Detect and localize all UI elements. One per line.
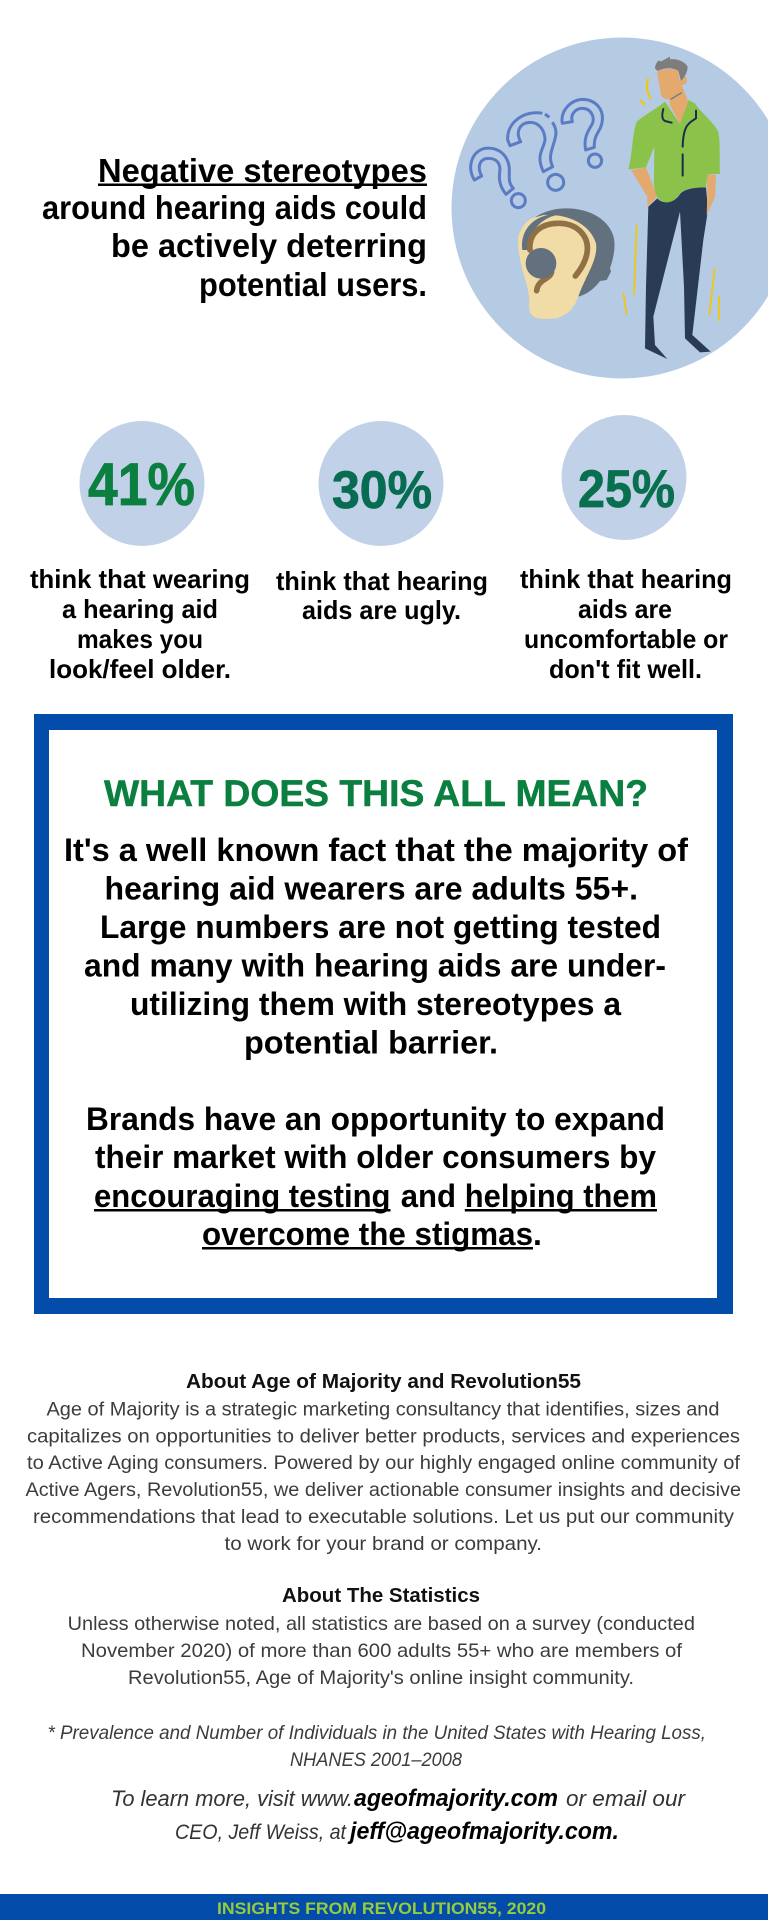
panel text: second paragraph: . <box>533 1216 542 1252</box>
text block: about the statistics: November 2020) of more than 600 adults 55+ who are members of <box>81 1640 683 1662</box>
text block: about the statistics <box>68 1585 695 1689</box>
panel text: first paragraph: utilizing them with stereotypes a <box>130 986 621 1022</box>
text block: about the statistics: Revolution55, Age of Majority's online insight community. <box>128 1667 634 1689</box>
stat text: 41%: think that wearing <box>30 564 250 594</box>
panel text: first paragraph: and many with hearing aids are under- <box>84 948 666 984</box>
footer bar: INSIGHTS FROM REVOLUTION55, 2020 <box>217 1899 546 1918</box>
text block: about age of majority: About Age of Majority and Revolution55 <box>186 1371 581 1393</box>
panel text: first paragraph: It's a well known fact that the majority of <box>64 832 688 868</box>
stat: 30% <box>276 421 488 625</box>
text block: contact details: ageofmajority.com <box>354 1785 558 1812</box>
heading text: Negative stereotypes <box>98 152 427 189</box>
text block: about age of majority <box>26 1371 741 1555</box>
panel text: second paragraph: encouraging testing <box>94 1178 390 1214</box>
panel text: second paragraph: helping them <box>465 1178 657 1214</box>
icon: ear with hearing aid <box>518 208 615 319</box>
text block: about age of majority: Active Agers, Revolution55, we deliver actionable consumer insights and decisive <box>26 1479 741 1501</box>
stat text: 25%: don't fit well. <box>549 654 702 684</box>
text block: about age of majority: Age of Majority is a strategic marketing consultancy that identifies, sizes and <box>46 1398 720 1420</box>
stat text: 25%: uncomfortable or <box>524 624 728 654</box>
text block: about the statistics: About The Statistics <box>282 1585 480 1607</box>
panel: what does this all mean <box>34 714 733 1314</box>
icon: question marks <box>471 99 602 208</box>
stat: 41% <box>30 421 250 684</box>
illustration: man, ear and question marks in a circle <box>452 38 768 378</box>
stat text: 41%: look/feel older. <box>49 654 231 684</box>
text block: contact details: or email our <box>566 1786 687 1811</box>
heading text: potential users. <box>199 266 427 303</box>
panel text: second paragraph <box>86 1101 665 1252</box>
stat: 25%: 25% <box>578 460 675 519</box>
panel text: second paragraph: their market with older consumers by <box>95 1139 656 1175</box>
stat text: 41%: makes you <box>77 624 203 654</box>
text block: contact details: CEO, Jeff Weiss, at <box>175 1821 347 1844</box>
panel text: second paragraph: Brands have an opportunity to expand <box>86 1101 665 1137</box>
stat text: 30%: think that hearing <box>276 566 488 596</box>
text block: about the statistics: Unless otherwise noted, all statistics are based on a survey (conducted <box>68 1613 695 1635</box>
stat: 41%: 41% <box>88 451 195 518</box>
footer bar <box>0 1894 768 1920</box>
panel text: first paragraph: hearing aid wearers are adults 55+. <box>104 870 638 906</box>
text block: footnote: * Prevalence and Number of Individuals in the United States with Hearing Loss, <box>48 1722 706 1744</box>
stat text: 41% <box>30 564 250 684</box>
stat: 25% <box>520 415 732 684</box>
stat text: 30%: aids are ugly. <box>302 595 461 625</box>
text block: about age of majority: recommendations that lead to executable solutions. Let us put our community <box>33 1506 734 1528</box>
panel text: first paragraph: Large numbers are not getting tested <box>100 909 661 945</box>
stat text: 25%: aids are <box>578 594 672 624</box>
panel text: first paragraph: potential barrier. <box>244 1024 498 1060</box>
stat text: 41%: a hearing aid <box>62 594 218 624</box>
stat: 30%: 30% <box>332 461 432 520</box>
text block: footnote: NHANES 2001–2008 <box>290 1749 462 1771</box>
icon: standing man <box>623 57 720 359</box>
heading text: be actively deterring <box>111 227 427 264</box>
text block: contact details: jeff@ageofmajority.com. <box>347 1818 619 1845</box>
text block: contact details: To learn more, visit www. <box>111 1786 353 1811</box>
heading text <box>42 152 427 303</box>
panel text: first paragraph <box>64 832 688 1060</box>
heading text: around hearing aids could <box>42 189 427 226</box>
text block: contact details <box>111 1785 687 1845</box>
stat text: 30% <box>276 566 488 625</box>
panel text: second paragraph: overcome the stigmas <box>202 1216 533 1252</box>
text block: about age of majority: to work for your brand or company. <box>224 1533 542 1555</box>
text block: about age of majority: to Active Aging consumers. Powered by our highly engaged online community of <box>27 1452 741 1474</box>
panel text: second paragraph: and <box>401 1178 456 1214</box>
panel heading: WHAT DOES THIS ALL MEAN? <box>104 773 648 814</box>
stat text: 25% <box>520 564 732 684</box>
text block: about age of majority: capitalizes on opportunities to deliver better products, services and experiences <box>27 1426 740 1448</box>
text block: footnote <box>48 1722 706 1771</box>
stat text: 25%: think that hearing <box>520 564 732 594</box>
